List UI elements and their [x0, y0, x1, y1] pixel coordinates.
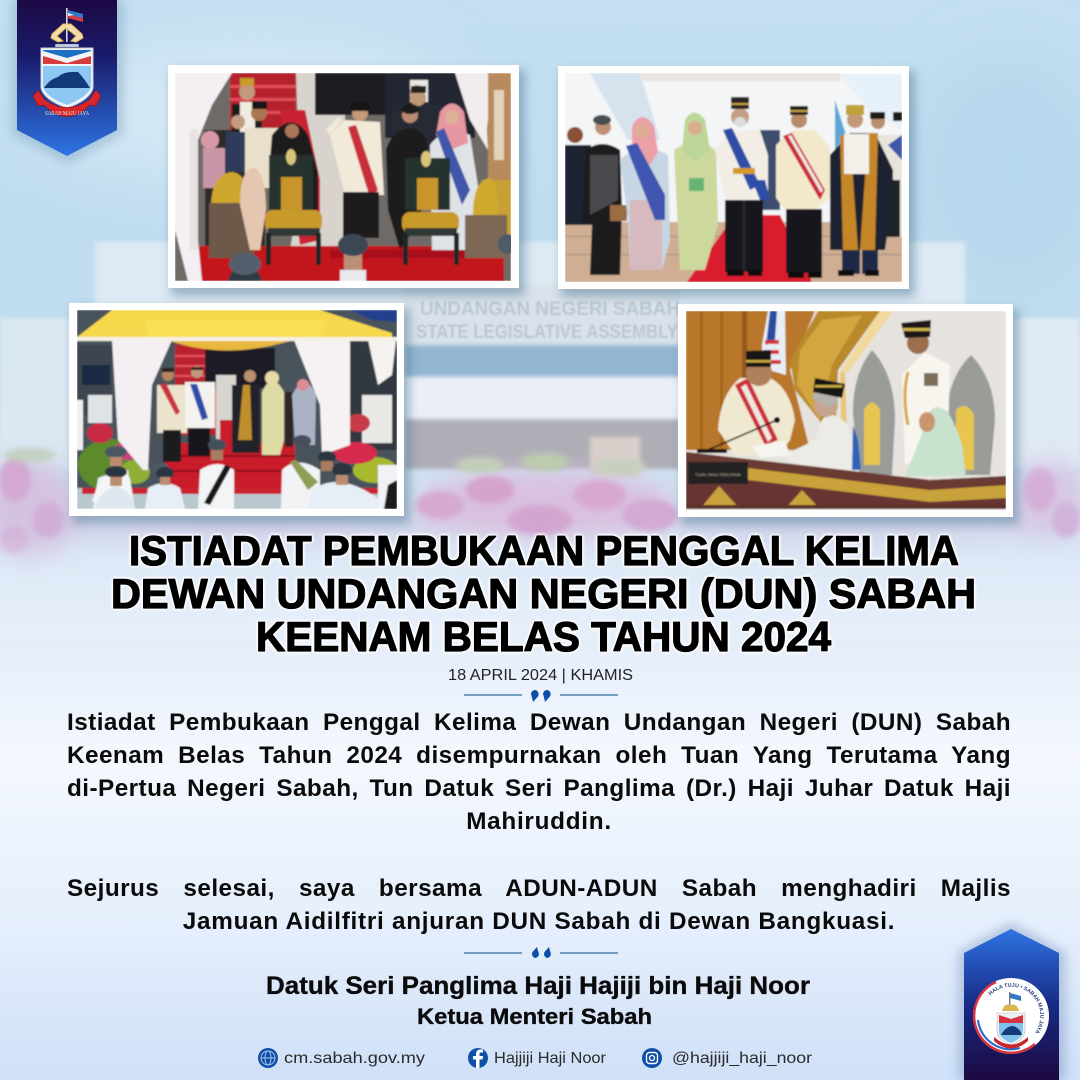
body paragraph 1 — [67, 709, 1011, 835]
icon: instagram — [642, 1048, 662, 1068]
chair covers — [211, 172, 248, 205]
instagram text: @hajjiji_haji_noor — [672, 1050, 813, 1067]
body paragraph 2 — [67, 875, 1011, 935]
icon: globe — [258, 1048, 278, 1068]
Chief Minister — [718, 378, 795, 455]
icon: circular logo: HALA TUJU • SABAH MAJU JAYA — [988, 983, 1044, 1034]
chairs — [269, 155, 313, 210]
thrones — [853, 350, 895, 475]
man white with blue sash — [715, 130, 768, 200]
standing officer — [902, 352, 950, 465]
woman green hijab — [905, 407, 966, 476]
woman in black floral — [386, 128, 428, 250]
woman pink hijab — [620, 149, 670, 270]
woman with pink hijab — [430, 132, 481, 250]
desk — [686, 452, 1006, 509]
carpet floor — [199, 246, 504, 281]
faded building sign: UNDANGAN NEGERI SABAH — [420, 299, 680, 320]
tent roof — [77, 310, 392, 340]
icon: circular logo — [972, 978, 1049, 1054]
guards — [93, 474, 135, 509]
seated Head of State — [782, 415, 860, 474]
title: KEENAM BELAS TAHUN 2024 — [256, 613, 832, 660]
microphone and paper — [708, 420, 777, 450]
icon: motto ribbon — [33, 90, 101, 117]
facebook text: Hajjiji Haji Noor — [494, 1050, 607, 1067]
icon: flag and hands — [51, 8, 83, 47]
signature name and role: Datuk Seri Panglima Haji Hajiji bin Haji Noor — [266, 972, 810, 1000]
background people — [232, 104, 262, 139]
body paragraph 1: Istiadat Pembukaan Penggal Kelima Dewan Undangan Negeri (DUN) Sabah — [67, 709, 1011, 736]
icon: shield — [41, 48, 93, 108]
website text: cm.sabah.gov.my — [284, 1050, 425, 1067]
title: DEWAN UNDANGAN NEGERI (DUN) SABAH — [111, 570, 976, 617]
shoes — [727, 270, 744, 276]
woman black floral — [582, 144, 622, 275]
body paragraph 1: Keenam Belas Tahun 2024 disempurnakan oleh Tuan Yang Terutama Yang — [67, 742, 1011, 769]
icon: facebook — [468, 1048, 488, 1068]
speaker in gold robe — [830, 133, 893, 250]
body paragraph 1: Mahiruddin. — [466, 808, 612, 835]
title — [111, 527, 976, 660]
photo 4: chamber with Head of State and Chief Minister: TUAN YANG TERUTAMA — [695, 472, 741, 477]
body paragraph 1: di-Pertua Negeri Sabah, Tun Datuk Seri Panglima (Dr.) Haji Juhar Datuk Haji — [67, 775, 1011, 802]
faded building sign — [416, 299, 680, 343]
date line: 18 APRIL 2024 | KHAMIS — [448, 667, 633, 684]
body paragraph 2: Jamuan Aidilfitri anjuran DUN Sabah di Dewan Bangkuasi. — [183, 908, 895, 935]
curtains — [112, 340, 172, 470]
background men — [565, 145, 591, 225]
title: ISTIADAT PEMBUKAAN PENGGAL KELIMA — [129, 527, 959, 574]
icon: motto ribbon: SABAH MAJU JAYA — [45, 110, 89, 117]
main figure — [330, 120, 384, 195]
body paragraph 2: Sejurus selesai, saya bersama ADUN-ADUN Sabah menghadiri Majlis — [67, 875, 1011, 902]
flowers — [78, 439, 142, 491]
man cream with red sash — [776, 130, 830, 210]
woman green — [674, 142, 718, 270]
signature name and role: Ketua Menteri Sabah — [417, 1004, 652, 1029]
faded building sign: STATE LEGISLATIVE ASSEMBLY — [416, 322, 678, 343]
dignitaries — [157, 385, 187, 433]
guards — [228, 265, 262, 281]
divider with quote marks top — [464, 690, 618, 702]
